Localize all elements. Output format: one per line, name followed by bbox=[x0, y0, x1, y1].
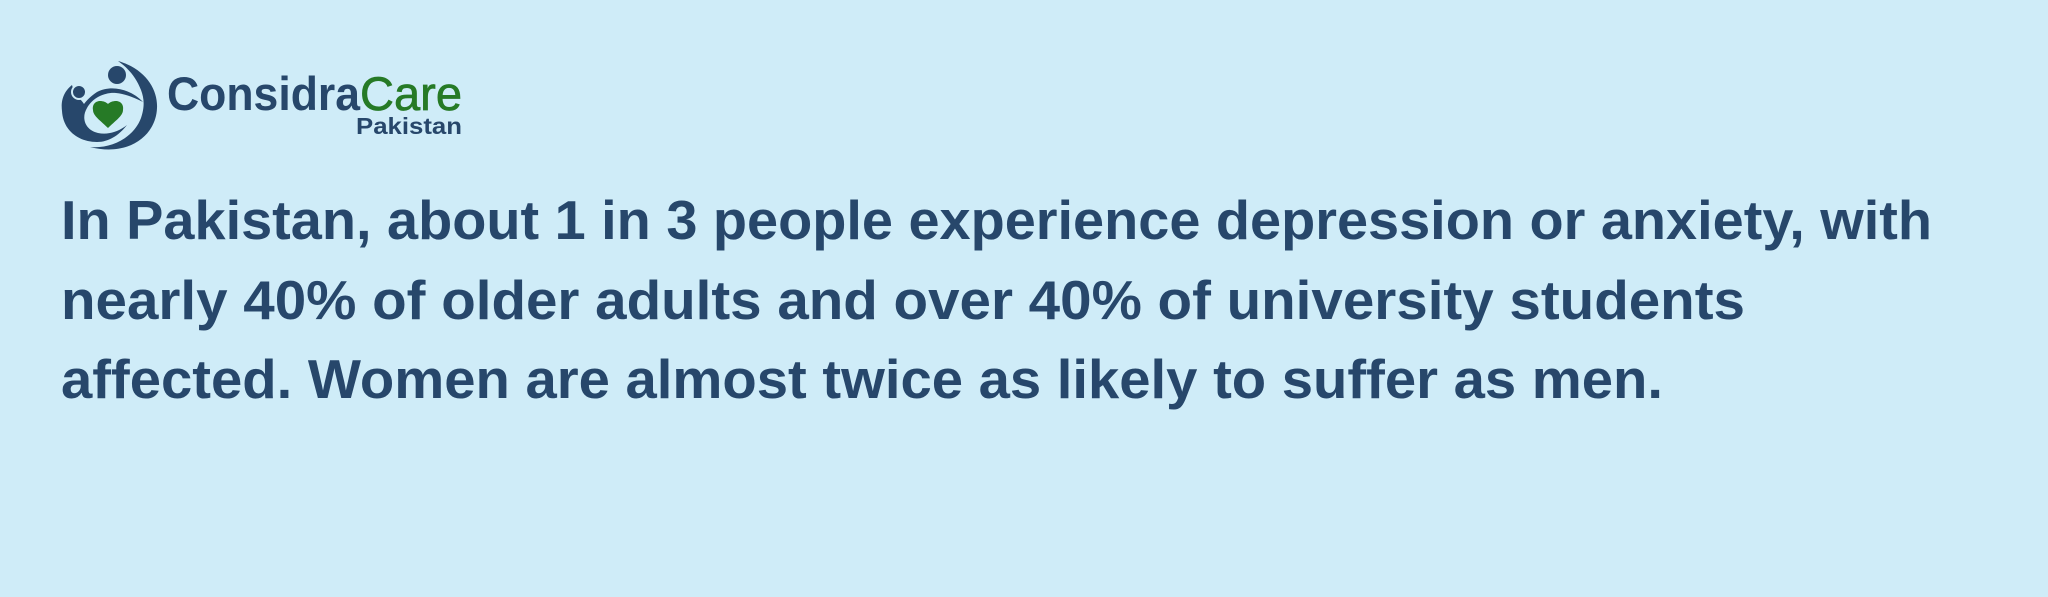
icon: caring figures around a heart bbox=[62, 61, 157, 150]
logo wordmark: Pakistan bbox=[356, 113, 462, 139]
text block: Pakistan mental health statistics: In Pakistan, about 1 in 3 people experience depression or anxiety, with bbox=[61, 189, 1932, 251]
logo wordmark: Care bbox=[360, 67, 462, 120]
logo wordmark: Considra bbox=[167, 67, 361, 120]
text block: Pakistan mental health statistics: affected. Women are almost twice as likely to suffer as men. bbox=[61, 348, 1663, 410]
logo wordmark bbox=[167, 67, 462, 139]
text block: Pakistan mental health statistics bbox=[61, 189, 1932, 410]
logo: ConsidraCare Pakistan bbox=[62, 61, 462, 150]
text block: Pakistan mental health statistics: nearly 40% of older adults and over 40% of university students bbox=[61, 269, 1745, 331]
icon: heart bbox=[93, 101, 123, 128]
